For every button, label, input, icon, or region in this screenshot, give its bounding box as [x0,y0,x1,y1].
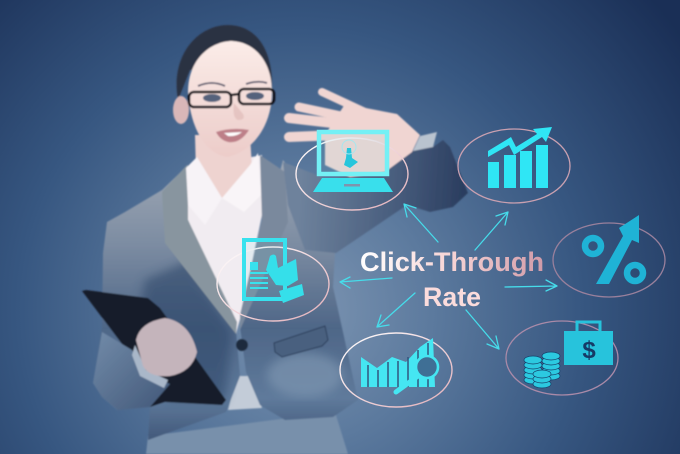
shirt [186,155,262,334]
jacket body right panel [240,160,358,420]
arrow: to growth chart [475,212,508,250]
ellipse: growth chart [458,129,570,203]
eyebrows [198,82,267,86]
arrow: to analytics [377,293,415,327]
arrow: to tablet [340,277,392,288]
shirt collar right [222,153,261,212]
holding hand [136,318,197,376]
title [360,247,544,312]
neck [195,135,252,198]
icon: tablet with pointing hand [244,240,304,303]
jacket body left panel [93,165,240,440]
arrow: to money [466,310,499,349]
arrow: to percent [505,280,557,291]
ellipse: percent [553,223,665,297]
jacket button [236,339,248,351]
left lapel [162,165,237,334]
icon: analytics with magnifier [361,338,438,392]
nose shadow [234,103,244,120]
shirt cuff [132,345,168,388]
icon: growth bar chart [488,127,552,188]
ellipse: money [506,321,618,395]
title: Rate [423,282,481,312]
trousers [146,412,348,454]
jacket highlight [267,353,343,397]
teeth [224,132,242,136]
ellipse: laptop [296,138,408,210]
sleeve cuff [413,132,437,151]
jacket shading [135,260,232,400]
icon: briefcase and coins [524,322,613,388]
right lapel [240,155,288,330]
jacket pocket [274,326,328,357]
ellipse: analytics [340,333,452,407]
raised sleeve [283,140,468,253]
ear [173,96,189,124]
tablet held in hand [82,290,226,407]
face [188,41,272,157]
arrows [340,204,557,349]
eyes [203,92,264,102]
icon: laptop with click [313,132,393,192]
glasses [189,89,274,107]
icon: percent with arrow [585,215,643,284]
ellipse: tablet [217,247,329,321]
raised hand [289,92,420,177]
lips [216,129,249,142]
arrow: to laptop [404,204,438,242]
shirt collar [186,157,222,225]
hair [177,25,272,100]
lower sleeve [93,332,170,410]
woman in business suit [82,25,468,454]
coin stacks [524,352,560,388]
icon: briefcase and coins: $ [582,337,596,364]
title: Click-Through [360,247,544,277]
lower shirt wedge [228,376,262,410]
